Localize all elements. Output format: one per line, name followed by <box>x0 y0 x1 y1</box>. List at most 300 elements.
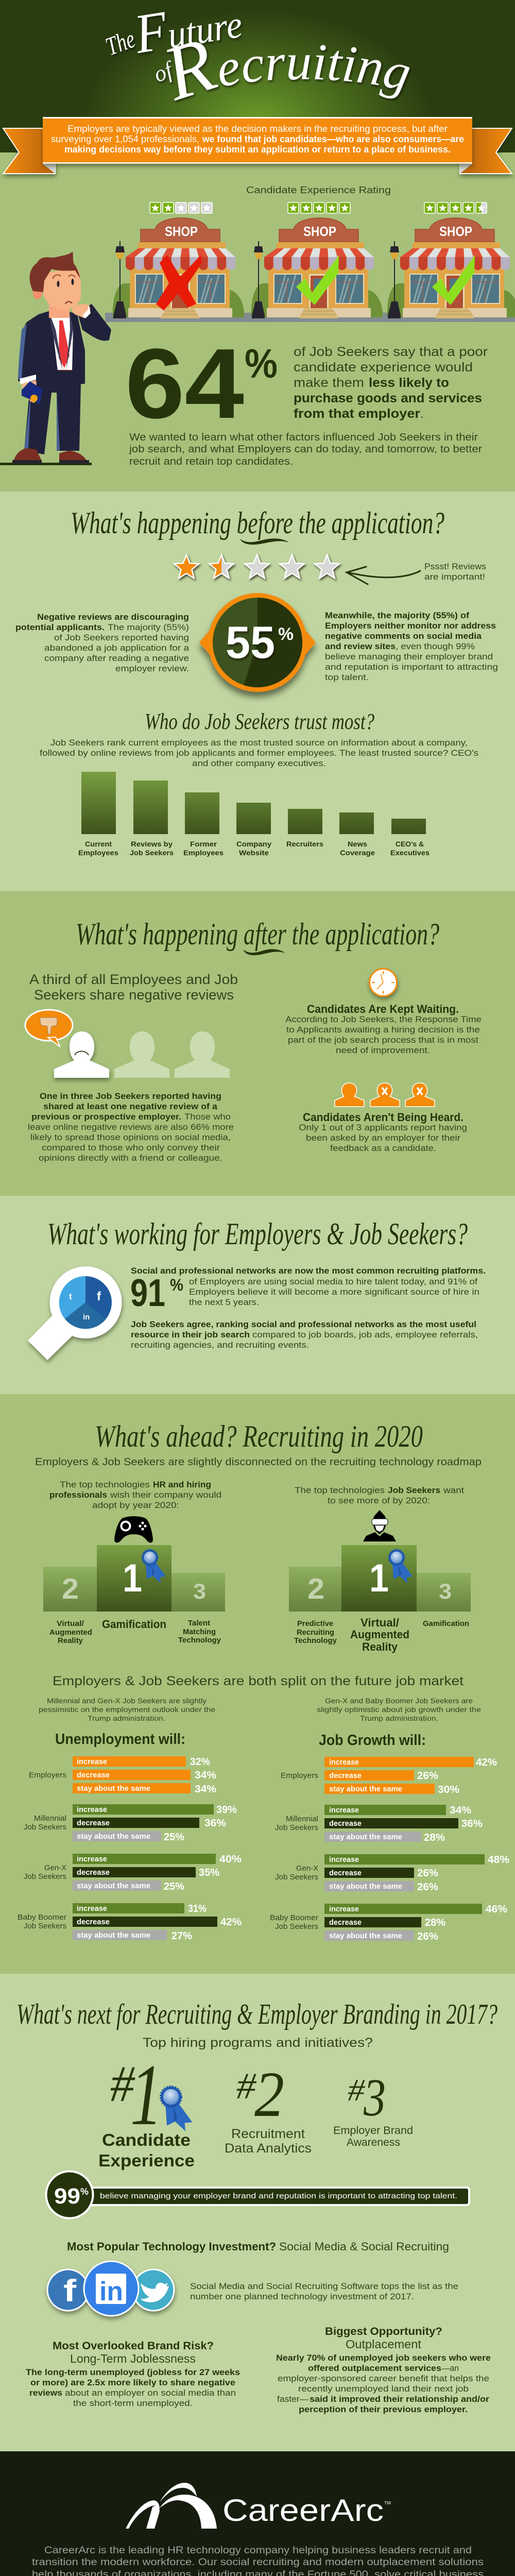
podium: employers <box>43 1545 225 1612</box>
bar chart: job growth: increase <box>329 1758 359 1767</box>
text: biggest opportunity: faster— <box>277 2394 308 2404</box>
title: Recruiting <box>167 41 411 103</box>
illustration: thinking businessman <box>0 251 111 465</box>
text: negative reviews: employer review. <box>115 664 189 673</box>
bar chart: unemployment: decrease <box>77 1771 110 1780</box>
podium labels: employers: Virtual/ <box>57 1619 84 1628</box>
bar chart: unemployment: 32% <box>190 1756 210 1768</box>
bar chart: unemployment: Job Seekers <box>24 1872 66 1881</box>
text: trust paragraph: Job Seekers rank current employees as the most trusted source on information about a company, <box>50 738 468 748</box>
text: one in three: Those who <box>184 1112 231 1122</box>
text: HR top technologies: adopt by year 2020: <box>92 1500 179 1510</box>
podium: employers: 3 <box>193 1579 206 1603</box>
bar chart: job growth: 34% <box>450 1805 471 1816</box>
text: candidates kept waiting: need of improvement. <box>336 1045 430 1055</box>
bar chart: job growth: 36% <box>461 1818 483 1829</box>
text: 64 percent explanation: . <box>420 406 424 421</box>
bar chart: unemployment: Gen-X <box>44 1863 66 1872</box>
panel: what's ahead <box>0 1394 515 1974</box>
text: job seekers agree: recruiting agencies, and recruiting events. <box>131 1340 309 1350</box>
text: intro paragraph <box>129 432 482 467</box>
callout: reviews are important: Pssst! Reviews <box>424 562 486 571</box>
bar chart: trusted sources <box>78 772 430 857</box>
text: brand risk: Most Overlooked Brand Risk? <box>53 2340 214 2352</box>
bar chart: trusted sources: Job Seekers <box>130 849 174 857</box>
icon: magnifier with social pie: t <box>69 1292 72 1301</box>
title: of <box>150 56 179 87</box>
subheading: top hiring programs: Top hiring programs and initiatives? <box>143 2036 373 2050</box>
bar chart: trusted sources: Coverage <box>340 849 375 857</box>
text: brand risk: about an employer on social media than <box>65 2388 236 2398</box>
bar chart: trusted sources: Reviews by <box>131 840 173 848</box>
text: one in three: opinions directly with a friend or colleague. <box>39 1153 222 1163</box>
bar chart: job growth: stay about the same <box>329 1785 402 1793</box>
text: negative reviews: Negative reviews are discouraging <box>37 612 189 622</box>
bar chart: unemployment: 35% <box>199 1867 219 1878</box>
podium: job seekers <box>289 1545 471 1612</box>
panel: intro <box>0 0 515 467</box>
text: biggest opportunity <box>276 2326 491 2414</box>
text: job seeker top technologies: want <box>443 1485 464 1495</box>
text: pessimistic: pessimistic on the employment outlook under the <box>39 1705 215 1714</box>
bar chart: unemployment: Job Seekers <box>24 1823 66 1832</box>
text: 64 percent explanation: make them <box>294 376 364 390</box>
rating: three shop <box>424 202 487 213</box>
road <box>105 313 515 322</box>
text: biggest opportunity: said it improved their relationship and/or <box>310 2394 489 2404</box>
intro text <box>51 124 464 155</box>
podium labels: employers: Gamification <box>102 1618 166 1631</box>
podium: job seekers: 2 <box>307 1572 324 1605</box>
text: biggest opportunity: Nearly 70% of unemployed job seekers who were <box>276 2353 491 2363</box>
text: employers neither monitor: top talent. <box>325 672 369 682</box>
subheading: a third share negative reviews <box>29 972 238 1003</box>
ribbon banner <box>3 117 512 174</box>
text: HR top technologies: wish their company would <box>110 1490 221 1500</box>
bar chart: job growth: increase <box>329 1905 359 1913</box>
bar chart: trusted sources: Executives <box>390 849 430 857</box>
bar chart: job growth: stay about the same <box>329 1882 402 1891</box>
bar chart: job growth: increase <box>329 1855 359 1864</box>
podium labels: job seekers: Augmented <box>350 1628 409 1641</box>
bar chart: unemployment: 36% <box>204 1818 226 1829</box>
bar chart: job growth: 46% <box>486 1904 507 1915</box>
star rating <box>174 555 339 578</box>
bar chart: job growth: stay about the same <box>329 1833 402 1841</box>
rank 2: recruitment data analytics: # <box>236 2065 257 2107</box>
heading: most popular technology investment: Social Media & Social Recruiting <box>279 2240 449 2253</box>
text: employers neither monitor: and reputation is important to attracting <box>325 662 498 672</box>
bar chart: job growth: stay about the same <box>329 1931 402 1940</box>
bar chart: job growth: decrease <box>329 1918 362 1927</box>
bar chart: trusted sources: News <box>348 840 367 848</box>
podium: job seekers: 1 <box>369 1556 389 1600</box>
stat: 91 percent: 91 <box>130 1271 165 1314</box>
bar chart: unemployment: decrease <box>77 1918 110 1926</box>
text: 91 percent explanation: of Employers are using social media to hire talent today, and 91% of <box>189 1277 477 1286</box>
bar chart: unemployment: increase <box>77 1904 107 1913</box>
shop with red cross: SHOP <box>165 224 198 239</box>
text: negative reviews: abandoned a job application for a <box>44 643 190 653</box>
panel: what's next <box>0 1974 515 2451</box>
rank 2: recruitment data analytics: Data Analytics <box>225 2141 312 2156</box>
text: 91 percent explanation: Employers believe it will become a more significant source of hire in <box>189 1287 479 1297</box>
text: candidates kept waiting: According to Job Seekers, the Response Time <box>285 1014 482 1024</box>
text: biggest opportunity: offered outplacement services <box>308 2363 441 2373</box>
text: pessimistic: Millennial and Gen-X Job Seekers are slightly <box>47 1697 207 1705</box>
intro text: surveying over 1,054 professionals, <box>51 134 199 144</box>
text: candidates not heard <box>299 1111 467 1153</box>
text: candidates not heard: Only 1 out of 3 applicants report having <box>299 1123 467 1132</box>
text: negative reviews: The majority (55%) <box>108 622 189 632</box>
podium labels: employers: Matching <box>183 1628 216 1636</box>
text: job seekers agree <box>131 1319 478 1350</box>
text: negative reviews <box>15 612 190 673</box>
donut: 55 percent <box>199 593 316 692</box>
bar chart: job growth: decrease <box>329 1869 362 1877</box>
podium labels: job seekers: Virtual/ <box>360 1616 399 1629</box>
icon: three orange people <box>335 1083 435 1107</box>
text: job seeker top technologies: The top technologies <box>295 1485 385 1495</box>
text: candidates kept waiting: Candidates Are Kept Waiting. <box>307 1003 459 1015</box>
bar chart: job growth <box>270 1757 509 1942</box>
rating: two shop <box>288 202 350 213</box>
rating: one shop <box>150 202 212 213</box>
text: social recruiting software <box>190 2281 458 2301</box>
text: negative reviews: company after reading a negative <box>44 653 189 663</box>
bar chart: job growth: 48% <box>488 1854 509 1866</box>
rank 3: employer brand awareness: Employer Brand <box>333 2125 413 2137</box>
bar chart: job growth: decrease <box>329 1819 362 1828</box>
text: 64 percent explanation: of Job Seekers say that a poor <box>294 345 488 359</box>
text: job seekers agree: Job Seekers agree, ranking social and professional networks as the most useful <box>131 1319 476 1329</box>
callout: 99 percent: 99 <box>54 2184 80 2209</box>
text: 64 percent explanation: purchase goods and services <box>294 391 482 405</box>
callout: reviews are important: are important! <box>424 572 485 582</box>
text: HR top technologies <box>49 1480 221 1510</box>
text: brand risk: the short-term unemployed. <box>73 2398 193 2408</box>
icons: social networks: in <box>99 2277 123 2307</box>
podium labels: job seekers: Reality <box>362 1640 398 1653</box>
shop with red cross <box>113 218 244 318</box>
text: candidates kept waiting: part of the job search process that is in most <box>288 1035 478 1045</box>
text: biggest opportunity: Biggest Opportunity? <box>325 2326 442 2337</box>
podium labels: job seekers: Technology <box>294 1636 337 1645</box>
bar chart: unemployment: Job Seekers <box>24 1922 66 1930</box>
bar chart: unemployment: stay about the same <box>77 1882 150 1890</box>
text: employers neither monitor: believe managing their employer brand <box>325 652 493 662</box>
text: 64 percent explanation: from that employer <box>294 406 420 421</box>
arrow <box>347 567 420 584</box>
bar chart: unemployment: Employers <box>29 1771 66 1780</box>
text: biggest opportunity: —an <box>442 2363 459 2373</box>
text: employers neither monitor: negative comments on social media <box>325 631 482 641</box>
text: intro paragraph: We wanted to learn what other factors influenced Job Seekers in their <box>129 432 478 443</box>
bar chart: job growth: 28% <box>425 1917 445 1928</box>
chart heading: job growth: Job Growth will: <box>319 1732 426 1749</box>
bar chart: trusted sources: Website <box>239 849 269 857</box>
bar chart: unemployment: stay about the same <box>77 1832 150 1841</box>
icon: game controller <box>114 1516 153 1543</box>
text: job seekers agree: resource in their job search <box>131 1330 250 1340</box>
stat: 64 percent: % <box>245 341 278 386</box>
podium labels: employers: Augmented <box>49 1628 92 1637</box>
bar chart: job growth: Millennial <box>286 1815 318 1823</box>
bar chart: trusted sources: CEO's & <box>396 840 424 848</box>
podium labels: job seekers: Gamification <box>423 1619 469 1628</box>
icon: thumbs down bubble <box>25 1010 73 1047</box>
icon: clock <box>370 969 397 996</box>
chart heading: unemployment: Unemployment will: <box>55 1731 185 1748</box>
logo: CareerArc <box>126 2483 391 2529</box>
bar chart: trusted sources: Former <box>190 840 217 848</box>
text: employers neither monitor: and review sites <box>325 641 396 651</box>
text: brand risk: The long-term unemployed (jobless for 27 weeks <box>26 2367 240 2377</box>
text: job seeker top technologies <box>295 1485 464 1505</box>
bar chart: trusted sources: Current <box>85 840 112 848</box>
text: trust paragraph: and other company executives. <box>192 758 326 768</box>
text: brand risk: or more) are 2.5x more likely to share negative <box>30 2378 235 2387</box>
bar chart: unemployment: stay about the same <box>77 1931 150 1940</box>
bar chart: unemployment: 34% <box>195 1784 216 1795</box>
shop with green check: SHOP <box>303 224 336 239</box>
rank 3: employer brand awareness: Awareness <box>347 2137 400 2148</box>
rank 1: candidate experience: Candidate <box>102 2130 191 2149</box>
podium labels: job seekers: Predictive <box>297 1619 333 1628</box>
shop with green check: SHOP <box>439 224 472 239</box>
text: one in three: shared at least one negative review of a <box>43 1101 218 1111</box>
bar chart: job growth: 42% <box>476 1757 497 1768</box>
bar chart: job growth: 26% <box>417 1882 438 1893</box>
text: candidates kept waiting <box>285 1003 482 1055</box>
heading: candidate experience rating: Candidate Experience Rating <box>246 185 391 195</box>
rank 1: candidate experience: # <box>110 2055 135 2112</box>
bar chart: unemployment: decrease <box>77 1819 110 1827</box>
text: optimistic: Gen-X and Baby Boomer Job Seekers are <box>325 1697 473 1705</box>
text: one in three: One in three Job Seekers reported having <box>40 1091 221 1101</box>
donut: 55 percent: % <box>278 624 294 644</box>
text: candidates not heard: been asked by an employer for their <box>306 1133 460 1143</box>
text: brand risk <box>26 2340 240 2408</box>
bar chart: job growth: increase <box>329 1806 359 1815</box>
podium labels: employers: Talent <box>188 1619 210 1628</box>
bar chart: unemployment: 40% <box>219 1854 242 1865</box>
bar chart: job growth: Baby Boomer <box>270 1913 318 1922</box>
bar chart: unemployment <box>18 1756 242 1942</box>
text: one in three: previous or prospective employer. <box>31 1112 181 1122</box>
bar chart: job growth: Job Seekers <box>275 1922 318 1931</box>
text: social recruiting software: number one planned technology investment of 2017. <box>190 2292 414 2301</box>
logo: CareerArc: TM <box>384 2501 391 2505</box>
panel: footer <box>0 2451 515 2576</box>
stat: 64 percent: 64 <box>125 328 244 439</box>
text: job seeker top technologies: Job Seekers <box>388 1485 440 1495</box>
text: social recruiting software: Social Media and Social Recruiting Software tops the list as the <box>190 2281 458 2291</box>
heading: most popular technology investment: Most Popular Technology Investment? <box>67 2240 276 2253</box>
text: negative reviews: potential applicants. <box>15 622 105 632</box>
callout: reviews are important <box>424 562 486 582</box>
text: HR top technologies: professionals <box>49 1490 107 1500</box>
text: 64 percent explanation <box>294 345 488 421</box>
heading: who do job seekers trust: Who do Job Seekers trust most? <box>145 709 374 734</box>
rank 1: candidate experience: 1 <box>130 2046 162 2143</box>
text: biggest opportunity: recently unemployed land their next job <box>298 2384 469 2394</box>
subheading: technology roadmap: Employers & Job Seekers are slightly disconnected on the recruiting technology roadmap <box>35 1456 482 1468</box>
bar chart: trusted sources: Employees <box>78 849 118 857</box>
text: 91 percent explanation: the next 5 years. <box>189 1297 259 1307</box>
subheading: a third share negative reviews: A third of all Employees and Job <box>29 972 238 987</box>
podium labels: employers <box>49 1618 221 1645</box>
text: employers neither monitor: , even though 99% <box>396 641 475 651</box>
bar chart: unemployment: 31% <box>188 1903 207 1914</box>
rank 3: employer brand awareness: # <box>348 2073 365 2107</box>
text: one in three: likely to spread those opinions on social media, <box>30 1132 231 1142</box>
rank 3: employer brand awareness: 3 <box>363 2068 386 2127</box>
icon: magnifier with social pie: f <box>97 1290 101 1303</box>
panel: what's working <box>0 1196 515 1394</box>
bar chart: unemployment: 25% <box>164 1832 184 1843</box>
bar chart: unemployment: stay about the same <box>77 1784 150 1793</box>
logo: CareerArc: CareerArc <box>222 2493 384 2528</box>
bar chart: unemployment: 25% <box>164 1881 184 1892</box>
text: about CareerArc: transition the modern workforce. Our social recruiting and modern outplacement solutions <box>32 2557 484 2568</box>
bar chart: job growth: Job Seekers <box>275 1873 318 1882</box>
icon: magnifier with social pie <box>28 1266 122 1360</box>
text: pessimistic: Trump administration. <box>88 1714 165 1722</box>
bar chart: unemployment: increase <box>77 1855 107 1863</box>
callout: 99 percent: % <box>80 2187 89 2197</box>
text: one in three: leave online negative reviews are also 66% more <box>28 1122 234 1132</box>
rank 2: recruitment data analytics: Recruitment <box>231 2127 305 2141</box>
text: job seekers agree: compared to job boards, job ads, employee referrals, <box>252 1330 478 1340</box>
bar chart: unemployment: 34% <box>195 1770 216 1781</box>
icon: magnifier with social pie: in <box>83 1313 90 1321</box>
icon: three people with speech bubble <box>25 1010 230 1078</box>
subheading: split on job market: Employers & Job Seekers are both split on the future job market <box>53 1674 464 1688</box>
text: intro paragraph: recruit and retain top candidates. <box>129 456 293 467</box>
bar chart: job growth: 26% <box>417 1868 438 1879</box>
text: trust paragraph <box>40 738 478 768</box>
text: HR top technologies: HR and hiring <box>153 1480 211 1489</box>
rank 1: candidate experience <box>98 2046 195 2170</box>
title: Future <box>130 0 246 65</box>
podium labels: employers: Reality <box>58 1636 83 1645</box>
bar chart: unemployment: 42% <box>220 1917 242 1928</box>
bar chart: unemployment: increase <box>77 1805 107 1814</box>
icons: social networks <box>47 2261 174 2316</box>
bar chart: unemployment: increase <box>77 1757 107 1766</box>
icon: person with VR headset <box>363 1510 396 1541</box>
bar chart: trusted sources: Recruiters <box>286 840 323 848</box>
podium labels: job seekers: Recruiting <box>297 1628 334 1637</box>
text: trust paragraph: followed by online reviews from job applicants and former employees. The least trusted source? CEO's <box>40 748 478 758</box>
text: about CareerArc <box>24 2545 492 2576</box>
callout: 99 percent: believe managing your employer brand and reputation is important to attracting top talent. <box>100 2192 457 2200</box>
stat: 91 percent: % <box>170 1276 183 1294</box>
rank 2: recruitment data analytics: 2 <box>254 2059 284 2130</box>
text: job seeker top technologies: to see more of by 2020: <box>328 1496 430 1505</box>
callout: 99 percent <box>46 2171 469 2218</box>
bar chart: unemployment: 27% <box>171 1930 192 1942</box>
text: one in three <box>28 1091 234 1163</box>
subheading: a third share negative reviews: Seekers share negative reviews <box>34 987 234 1003</box>
text: intro paragraph: job search, and what Employers can do today, and tomorrow, to better <box>129 444 482 455</box>
shop with green check <box>251 218 383 318</box>
text: employers neither monitor: Employers neither monitor nor address <box>325 621 496 631</box>
panel: after the application <box>0 891 515 1196</box>
text: brand risk: Long-Term Joblessness <box>70 2352 196 2365</box>
rank 2: recruitment data analytics <box>225 2059 312 2156</box>
bar chart: job growth: 28% <box>424 1832 445 1843</box>
bar chart: job growth: 26% <box>417 1931 438 1942</box>
text: pessimistic <box>39 1697 215 1722</box>
text: brand risk: reviews <box>29 2388 62 2398</box>
intro text: we found that job candidates—who are also consumers—are <box>202 134 464 144</box>
intro text: making decisions way before they submit an application or return to a place of business. <box>64 144 451 155</box>
rank 3: employer brand awareness <box>333 2068 413 2148</box>
text: one in three: compared to those who only convey their <box>42 1143 220 1153</box>
bar chart: job growth: Employers <box>281 1771 318 1780</box>
podium: job seekers: 3 <box>439 1579 452 1603</box>
text: biggest opportunity: Outplacement <box>346 2337 422 2351</box>
title: The <box>102 24 139 61</box>
heading: most popular technology investment <box>67 2240 449 2253</box>
text: 64 percent explanation: less likely to <box>369 376 449 390</box>
bar chart: job growth: Job Seekers <box>275 1823 318 1832</box>
podium labels: job seekers <box>294 1616 469 1653</box>
podium labels: employers: Technology <box>178 1636 221 1645</box>
shop with green check <box>387 218 515 318</box>
intro text: Employers are typically viewed as the decision makers in the recruiting process, but after <box>67 124 448 134</box>
bar chart: trusted sources: Employees <box>183 849 224 857</box>
text: optimistic: Trump administration. <box>360 1714 438 1722</box>
title <box>102 0 411 103</box>
bar chart: job growth: Gen-X <box>296 1864 318 1873</box>
text: candidates not heard: feedback as a candidate. <box>330 1143 436 1153</box>
bar chart: unemployment: decrease <box>77 1868 110 1877</box>
rank 1: candidate experience: Experience <box>98 2151 195 2170</box>
bar chart: unemployment: Millennial <box>34 1814 66 1823</box>
heading: what's ahead: What's ahead? Recruiting in 2020 <box>95 1419 423 1453</box>
bar chart: trusted sources: Company <box>236 840 271 848</box>
text: optimistic: slightly optimistic about job growth under the <box>317 1705 481 1714</box>
text: biggest opportunity: employer-sponsored career benefit that helps the <box>278 2374 489 2383</box>
bar chart: unemployment: 39% <box>216 1804 237 1816</box>
text: social and professional networks: Social and professional networks are now the most common recruiting platforms. <box>131 1266 486 1276</box>
text: candidates not heard: Candidates Aren't Being Heard. <box>303 1111 464 1124</box>
text: optimistic <box>317 1697 481 1722</box>
text: 91 percent explanation <box>189 1277 479 1307</box>
text: employers neither monitor <box>325 611 498 682</box>
bar chart: unemployment: Baby Boomer <box>18 1913 66 1922</box>
bar chart: job growth: 30% <box>438 1784 459 1795</box>
text: employers neither monitor: Meanwhile, the majority (55%) of <box>325 611 469 620</box>
text: HR top technologies: The top technologies <box>60 1480 150 1489</box>
donut: 55 percent: 55 <box>226 617 275 668</box>
icons: social networks: f <box>63 2274 77 2308</box>
text: about CareerArc: CareerArc is the leading HR technology company helping business leaders recruit and <box>44 2545 472 2556</box>
panel: hero background <box>0 0 515 152</box>
text: candidates kept waiting: to Applicants awaiting a hiring decision is the <box>286 1025 480 1035</box>
bar chart: job growth: decrease <box>329 1771 362 1780</box>
text: biggest opportunity: perception of their previous employer. <box>299 2404 468 2414</box>
text: negative reviews: of Job Seekers reported having <box>54 633 189 642</box>
text: 64 percent explanation: candidate experience would <box>294 360 473 375</box>
bar chart: job growth: 26% <box>417 1770 438 1782</box>
podium: employers: 1 <box>123 1556 142 1600</box>
panel: before the application <box>0 492 515 891</box>
podium: employers: 2 <box>62 1572 79 1605</box>
